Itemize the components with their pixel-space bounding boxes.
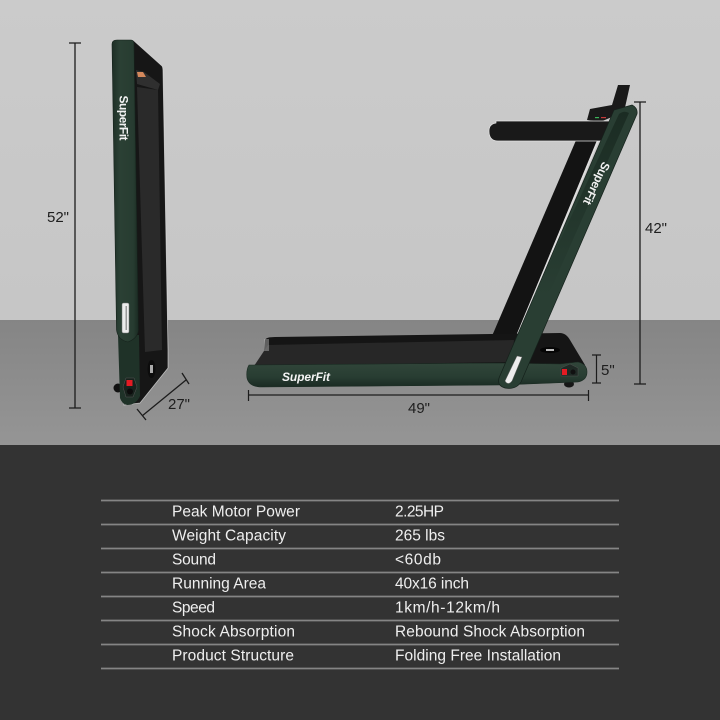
belt xyxy=(254,340,514,366)
power switch xyxy=(561,364,578,376)
specification table xyxy=(101,500,619,668)
row: speed: Speed xyxy=(172,600,215,616)
upright brand label: SuperFit xyxy=(580,160,613,207)
row: shock absorption xyxy=(172,624,585,640)
upright handle xyxy=(505,356,522,384)
top console xyxy=(587,85,630,122)
row: sound: Sound xyxy=(172,552,216,568)
wheel xyxy=(114,384,122,392)
height dimension: 42 inch xyxy=(634,102,667,384)
side rail xyxy=(112,40,138,342)
height dimension: 52 inch: 52" xyxy=(47,209,69,226)
height dimension: 52 inch xyxy=(47,43,81,408)
running belt xyxy=(137,87,162,352)
display xyxy=(148,360,156,378)
handlebar xyxy=(489,121,612,141)
row: peak motor power xyxy=(172,504,444,520)
red switch xyxy=(123,378,137,397)
row: peak motor power: Peak Motor Power xyxy=(172,504,300,520)
post highlight xyxy=(516,138,600,336)
row: product structure: Folding Free Installation xyxy=(395,648,561,664)
green upright rail xyxy=(499,105,637,388)
depth dimension: 27 inch: 27" xyxy=(168,396,190,413)
background: wall xyxy=(0,0,720,320)
height dimension: 42 inch: 42" xyxy=(645,220,667,237)
brand label: SuperFit xyxy=(282,370,331,384)
row: product structure xyxy=(172,648,561,664)
deck end cap xyxy=(264,339,269,351)
deck xyxy=(262,333,585,372)
deck display xyxy=(540,347,560,353)
length dimension: 49 inch xyxy=(248,390,588,417)
row: peak motor power: 2.25HP xyxy=(395,504,444,520)
background: floor xyxy=(0,320,720,445)
row: product structure: Product Structure xyxy=(172,648,294,664)
row: weight capacity: Weight Capacity xyxy=(172,528,286,544)
unfolded treadmill, side view xyxy=(247,85,637,388)
row: weight capacity xyxy=(172,528,445,544)
row: speed: 1km/h-12km/h xyxy=(395,600,500,616)
controls xyxy=(136,70,160,90)
background: specification panel xyxy=(0,445,720,720)
lower rail xyxy=(118,335,140,405)
wheel xyxy=(564,380,574,388)
row: shock absorption: Rebound Shock Absorption xyxy=(395,624,585,640)
folded treadmill, side view xyxy=(112,40,168,405)
upright rail inner channel xyxy=(534,112,629,296)
row: shock absorption: Shock Absorption xyxy=(172,624,295,640)
row: running area: 40x16 inch xyxy=(395,576,469,592)
row: sound: <60db xyxy=(395,552,441,568)
row: running area: Running Area xyxy=(172,576,266,592)
black upright xyxy=(492,138,598,336)
green base rail xyxy=(247,362,587,387)
brand label: SuperFit xyxy=(116,96,130,140)
depth dimension: 27 inch xyxy=(137,373,190,420)
deck height dimension: 5 inch: 5" xyxy=(601,362,615,379)
length dimension: 49 inch: 49" xyxy=(408,400,430,417)
deck height dimension: 5 inch xyxy=(592,355,615,383)
row: speed xyxy=(172,600,500,616)
handle xyxy=(122,303,129,333)
row: running area xyxy=(172,576,469,592)
row: weight capacity: 265 lbs xyxy=(395,528,445,544)
row: sound xyxy=(172,552,441,568)
